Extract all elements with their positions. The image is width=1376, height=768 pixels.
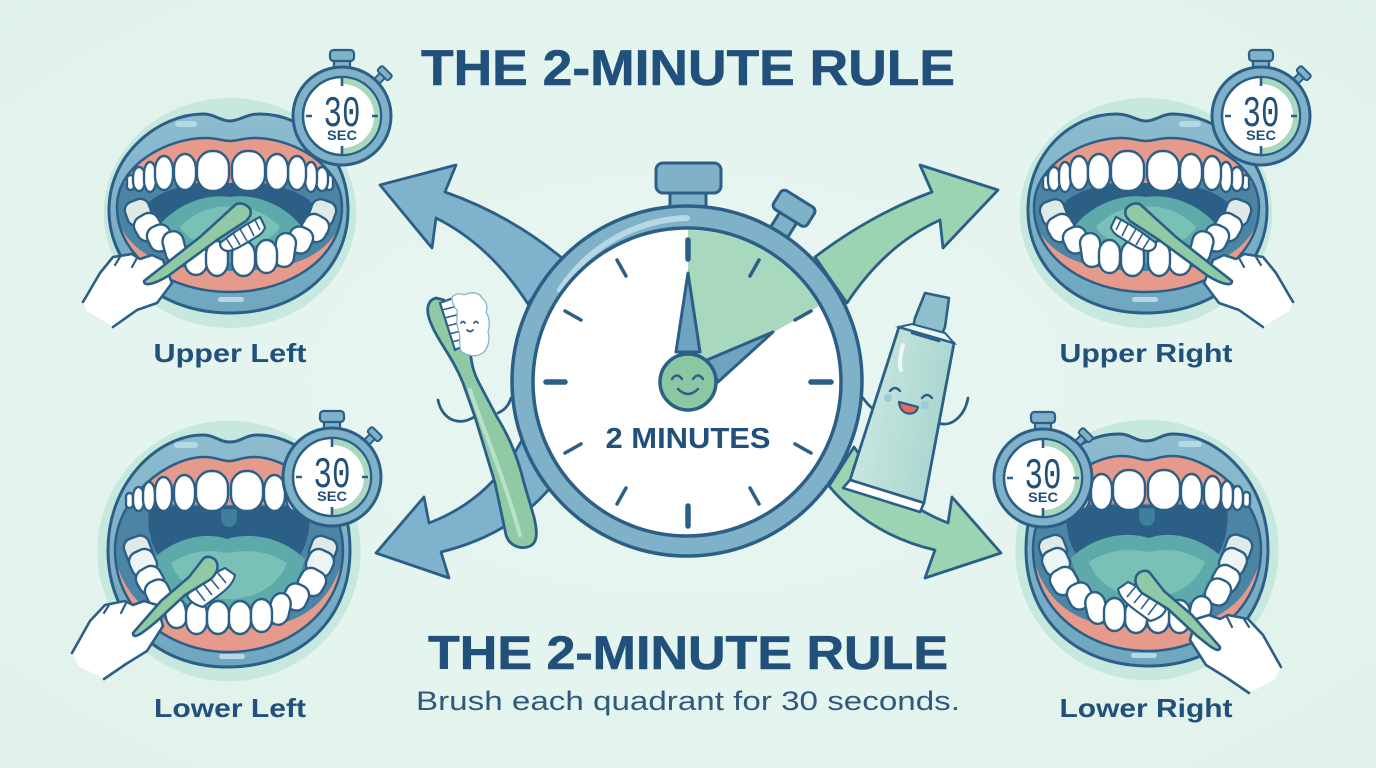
stopwatch: upper right 30 sec	[1212, 50, 1312, 165]
dial ticks	[546, 240, 831, 526]
mouth: upper right	[1020, 98, 1272, 328]
mouth: lower left	[97, 421, 361, 681]
stopwatch: upper left 30 sec: SEC	[327, 127, 357, 143]
ring highlight	[560, 218, 687, 290]
arrow: to upper left	[380, 165, 562, 304]
panel: upper left quadrant	[83, 50, 393, 368]
stopwatch: upper right 30 sec: 30	[1242, 90, 1280, 140]
panel: upper right quadrant	[1020, 50, 1312, 368]
label: upper right: Upper Right	[1060, 338, 1233, 368]
mouth: lower right	[1015, 420, 1279, 680]
stopwatch: upper left 30 sec	[293, 50, 393, 165]
hand and toothbrush: lower left	[72, 557, 235, 679]
minute hand	[676, 273, 700, 352]
toothpaste tube character	[843, 293, 968, 512]
30-second green wedge	[688, 230, 819, 382]
arrow: to upper right	[815, 165, 998, 303]
hand and toothbrush: upper right	[1111, 203, 1293, 327]
dial label: 2 MINUTES	[606, 423, 770, 455]
stopwatch: upper right 30 sec: SEC	[1246, 127, 1276, 143]
label: lower left: Lower Left	[154, 693, 306, 723]
toothbrush character	[428, 293, 536, 548]
smiling hub	[660, 354, 716, 410]
stopwatch: lower left 30 sec: 30	[314, 451, 350, 501]
arrow: to lower right	[829, 447, 1001, 578]
stopwatch: lower right 30 sec: SEC	[1028, 489, 1058, 505]
subtitle: Brush each quadrant for 30 seconds.	[416, 686, 960, 716]
hand and toothbrush: upper left	[83, 203, 265, 327]
panel: lower right quadrant	[994, 412, 1281, 723]
arrow: to lower left	[376, 440, 550, 578]
title: THE 2-MINUTE RULE	[421, 40, 955, 96]
label: lower right: Lower Right	[1060, 693, 1233, 723]
stopwatch: lower right 30 sec: 30	[1024, 452, 1062, 502]
stopwatch: upper left 30 sec: 30	[324, 90, 360, 140]
stopwatch: lower left 30 sec: SEC	[317, 488, 347, 504]
case ring	[512, 206, 862, 556]
crown	[656, 163, 817, 243]
dial face	[533, 228, 841, 536]
mouth: upper left	[104, 98, 356, 328]
label: upper left: Upper Left	[154, 338, 307, 368]
central stopwatch	[512, 163, 862, 556]
heading: bottom title: THE 2-MINUTE RULE	[428, 626, 948, 679]
panel: lower left quadrant	[72, 411, 383, 723]
second hand	[707, 332, 773, 382]
stopwatch: lower left 30 sec	[283, 411, 383, 526]
hand and toothbrush: lower right	[1118, 571, 1281, 693]
stopwatch: lower right 30 sec	[994, 412, 1094, 527]
